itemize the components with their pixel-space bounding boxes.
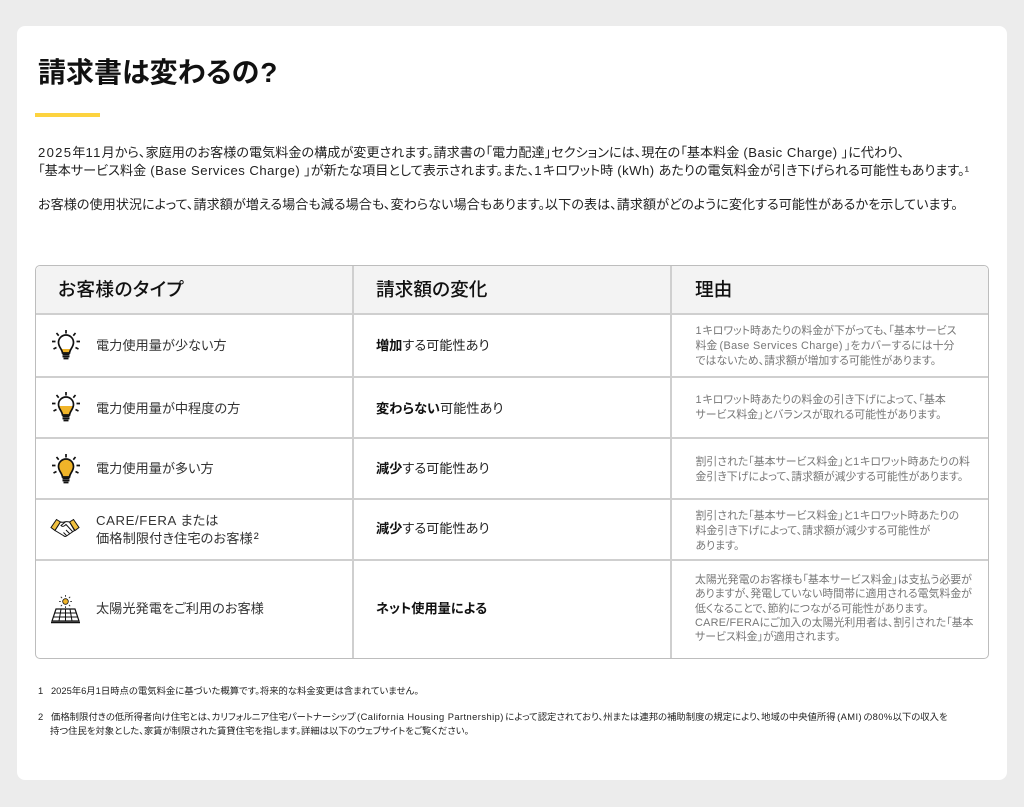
column heading: customer type: お客様のタイプ <box>58 279 184 300</box>
table header background <box>36 266 988 314</box>
text: CARE/FERA customers: CARE/FERA または <box>96 512 218 528</box>
footnote 2: 2 価格制限付きの低所得者向け住宅とは、カリフォルニア住宅パートナーシップ(California Housing Partnership)によって認定されており、州または連邦の補助制度の規定により、地域の中央値所得(AMI)の80%以下の収入を <box>38 712 948 722</box>
footnote 1: 1 2025年6月1日時点の電気料金に基づいた概算です。将来的な料金変更は含まれていません。 <box>38 686 419 696</box>
reason: decrease: 料金引き下げによって、請求額が減少する可能性が <box>696 524 930 536</box>
column heading: reason: 理由 <box>695 279 732 300</box>
change: no change: 変わらない可能性あり <box>376 401 503 416</box>
reason: solar: 低くなることで、節約につながる可能性があります。 <box>695 603 928 615</box>
reason: decrease <box>696 510 959 552</box>
reason: increase: 料金(Base Services Charge)」をカバーするには十分 <box>696 340 954 352</box>
reason: no change <box>696 394 946 421</box>
intro text: 2025年11月から、家庭用のお客様の電気料金の構成が変更されます。請求書の「電力配達」セクションには、現在の「基本料金 (Basic Charge) 」に代わり、 <box>38 144 904 160</box>
table: bill changes by customer type <box>35 265 989 659</box>
reason: decrease: 割引された「基本サービス料金」と1キロワット時あたりの <box>696 510 959 522</box>
title: 請求書は変わるの? <box>38 57 277 88</box>
intro text: 「基本サービス料金 (Base Services Charge) 」が新たな項目として表示されます。また、1キロワット時 (kWh) あたりの電気料金が引き下げられる可能性もあります。¹ <box>38 163 969 178</box>
icon: solar panel <box>51 595 80 624</box>
intro text second paragraph: お客様の使用状況によって、請求額が増える場合も減る場合も、変わらない場合もあります。以下の表は、請求額がどのように変化する可能性があるかを示しています。 <box>38 197 958 212</box>
column heading: bill change: 請求額の変化 <box>376 279 487 300</box>
icon: light bulb low <box>52 330 80 360</box>
reason: no change: 1キロワット時あたりの料金の引き下げによって、「基本 <box>696 394 946 406</box>
reason: increase: ではないため、請求額が増加する可能性があります。 <box>696 354 936 366</box>
reason: decrease <box>696 456 970 483</box>
text: CARE/FERA customers: 価格制限付き住宅のお客様² <box>96 530 259 546</box>
change: decrease: 減少する可能性あり <box>376 461 489 476</box>
change: depends on net usage: ネット使用量による <box>376 601 487 616</box>
icon: light bulb medium <box>52 392 80 422</box>
reason: solar: サービス料金」が適用されます。 <box>695 631 840 643</box>
text: high usage: 電力使用量が多い方 <box>96 461 214 476</box>
reason: no change: サービス料金」とバランスが取れる可能性があります。 <box>696 409 941 421</box>
reason: increase <box>696 324 956 366</box>
reason: solar: ありますが、発電していない時間帯に適用される電気料金が <box>695 588 972 600</box>
text: low usage: 電力使用量が少ない方 <box>96 338 227 353</box>
reason: solar: 太陽光発電のお客様も「基本サービス料金」は支払う必要が <box>695 574 972 586</box>
reason: solar: CARE/FERAにご加入の太陽光利用者は、割引された「基本 <box>695 617 973 629</box>
icon: handshake <box>50 518 80 537</box>
icon: light bulb high <box>52 454 80 484</box>
reason: decrease: あります。 <box>696 540 739 552</box>
reason: decrease: 割引された「基本サービス料金」と1キロワット時あたりの料 <box>696 456 970 468</box>
reason: solar <box>695 574 973 643</box>
text: medium usage: 電力使用量が中程度の方 <box>96 401 240 416</box>
footnote 2: 持つ住民を対象とした、家賃が制限された賃貸住宅を指します。詳細は以下のウェブサイトをご覧ください。 <box>50 726 469 736</box>
intro text <box>38 144 969 178</box>
text: CARE/FERA customers <box>96 512 259 546</box>
text: solar customers: 太陽光発電をご利用のお客様 <box>96 601 264 616</box>
change: decrease: 減少する可能性あり <box>376 521 489 536</box>
footnote 2 <box>38 712 948 736</box>
reason: increase: 1キロワット時あたりの料金が下がっても、「基本サービス <box>696 324 956 336</box>
yellow accent rule <box>35 113 100 117</box>
reason: decrease: 金引き下げによって、請求額が減少する可能性があります。 <box>696 471 963 483</box>
change: increase: 増加する可能性あり <box>376 338 489 353</box>
